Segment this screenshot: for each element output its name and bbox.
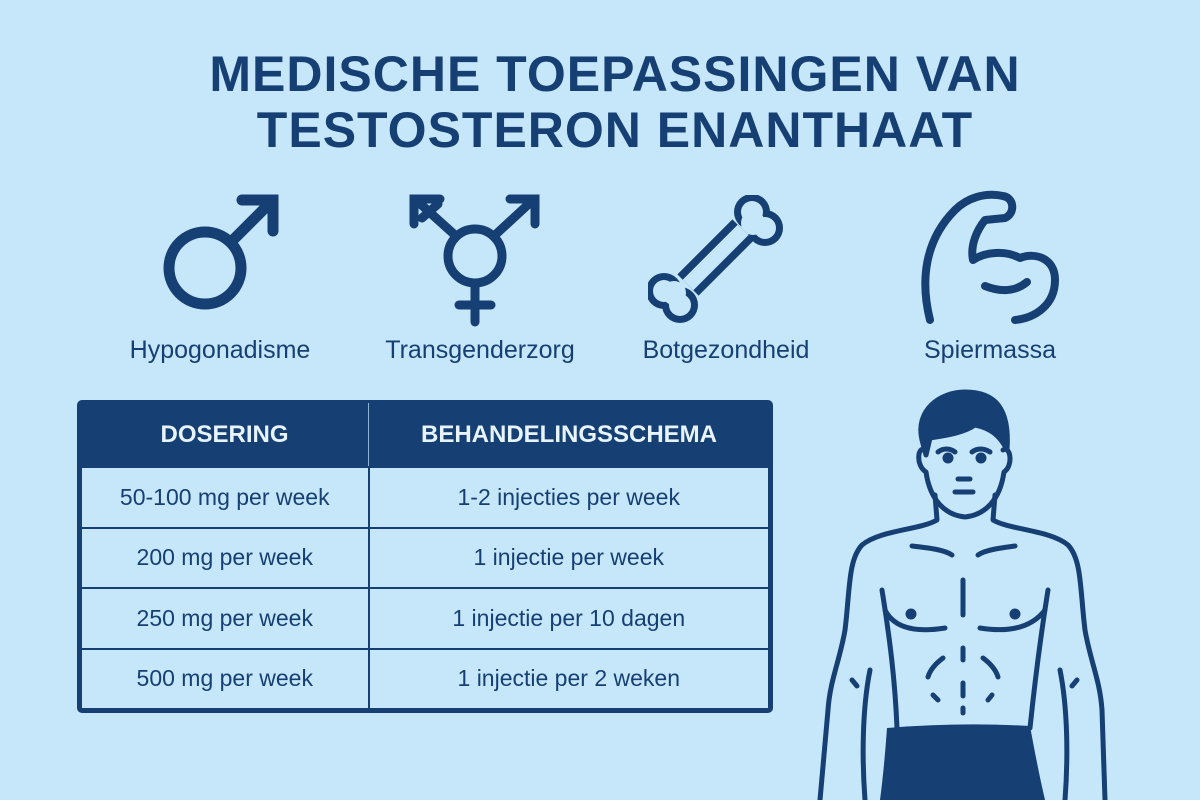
illustration: man torso [818, 390, 1108, 800]
table header: 1 injectie per week [474, 544, 664, 570]
title: MEDISCHE TOEPASSINGEN VAN [209, 46, 1021, 102]
table header: 1-2 injecties per week [458, 484, 680, 510]
table header: 200 mg per week [137, 544, 313, 570]
title [209, 46, 1021, 158]
title: TESTOSTERON ENANTHAAT [257, 102, 973, 158]
label: Spiermassa: Spiermassa [924, 336, 1056, 364]
icon: bone [648, 195, 783, 323]
table header [82, 420, 768, 708]
label: Botgezondheid: Botgezondheid [643, 336, 809, 364]
label: Transgenderzorg: Transgenderzorg [385, 336, 575, 364]
icon: flexed arm [921, 190, 1059, 324]
table header: 1 injectie per 2 weken [458, 665, 680, 691]
icon: transgender symbol [410, 194, 540, 326]
table header: BEHANDELINGSSCHEMA [421, 420, 717, 448]
icon: male symbol [164, 194, 278, 310]
label: Hypogonadisme: Hypogonadisme [130, 336, 310, 364]
table header: 250 mg per week [137, 605, 313, 631]
table header: DOSERING [160, 420, 288, 448]
table header: 500 mg per week [137, 665, 313, 691]
table header: 50-100 mg per week [120, 484, 330, 510]
table header: 1 injectie per 10 dagen [452, 605, 685, 631]
table: dosering schedule [77, 400, 773, 713]
